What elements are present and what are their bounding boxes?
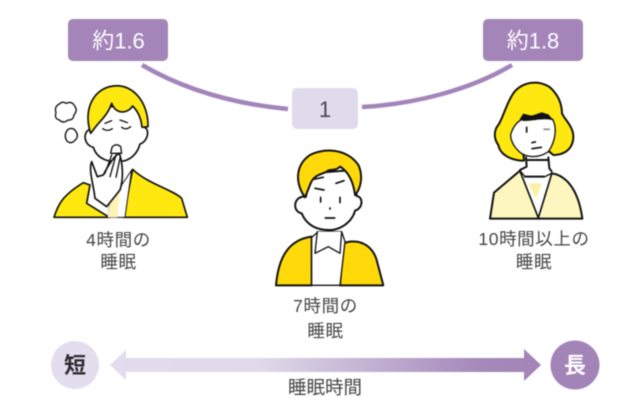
face [85, 107, 148, 162]
mouth [111, 145, 122, 153]
tie [108, 189, 120, 217]
caption: 7 hours: 7時間の [293, 296, 358, 316]
icon: woman, 10+ hours [490, 83, 582, 219]
fringe [520, 113, 553, 121]
icon: yawning man, 4 hours [54, 86, 187, 217]
caption: 10 hours or more: 10時間以上の [478, 229, 590, 249]
hand [91, 153, 122, 207]
badge: long [550, 340, 600, 390]
eyes [103, 120, 131, 130]
label: ratio 1.8 [483, 19, 583, 61]
caption: 7 hours: 睡眠 [307, 321, 344, 341]
label: ratio 1.8: 約1.8 [507, 28, 559, 54]
label: ratio 1.6 [68, 19, 168, 61]
curve: right connector [362, 65, 512, 107]
curve: left connector [142, 65, 288, 109]
caption: 4 hours: 4時間の [86, 230, 151, 250]
badge: short: 短 [64, 353, 86, 378]
caption: 4 hours [86, 230, 151, 272]
caption: 4 hours: 睡眠 [100, 252, 137, 272]
face [511, 118, 555, 157]
badge: short [51, 341, 99, 389]
face [295, 170, 361, 230]
inner top [520, 171, 552, 217]
shirt [108, 170, 132, 217]
hair [495, 83, 573, 161]
badge: long: 長 [564, 353, 586, 378]
collar line [525, 174, 544, 180]
caption: 10 hours or more: 睡眠 [516, 252, 552, 272]
shirt [312, 232, 345, 285]
facial features [527, 127, 549, 149]
hair [298, 151, 361, 197]
arrow: sleep duration [110, 349, 541, 381]
icon: man, 7 hours [276, 151, 383, 285]
neck [520, 157, 552, 171]
label: ratio 1.6: 約1.6 [92, 28, 145, 54]
breath puffs [55, 102, 76, 122]
hair [88, 86, 148, 133]
label: ratio 1: 1 [319, 97, 331, 122]
caption: 7 hours [293, 296, 358, 341]
collar [315, 232, 342, 253]
facial features [313, 177, 344, 218]
axis label: 睡眠時間 [288, 377, 362, 398]
jacket [276, 237, 383, 285]
label: ratio 1 [292, 88, 358, 129]
jacket [54, 169, 187, 217]
top [490, 171, 582, 219]
caption: 10 hours or more [478, 229, 590, 272]
